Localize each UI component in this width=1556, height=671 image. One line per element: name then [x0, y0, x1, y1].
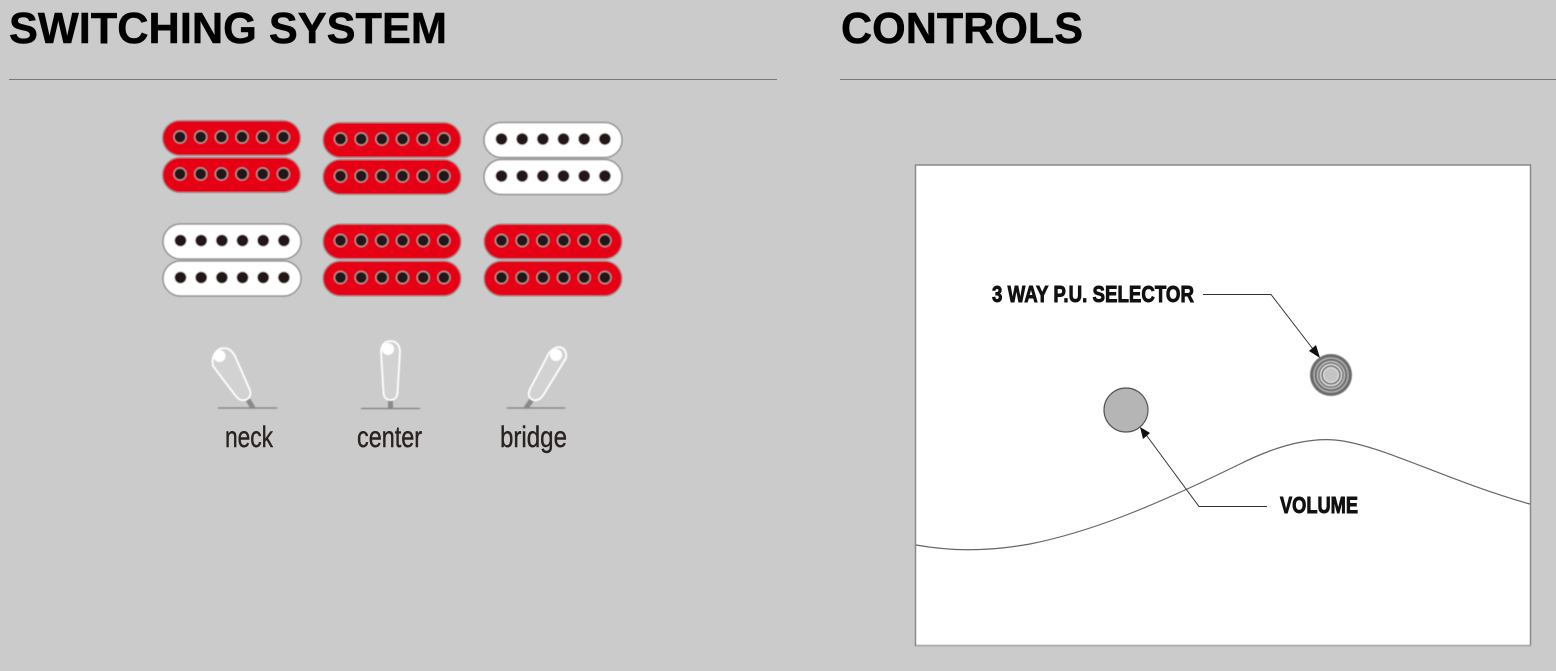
selector knob — [1310, 354, 1352, 396]
arrow: selector callout — [1203, 294, 1320, 358]
pickup: center position, top, active — [323, 122, 461, 194]
switch icon: center — [361, 341, 420, 408]
pickup: bridge position, top, inactive — [484, 122, 622, 194]
label: center: center — [357, 421, 422, 454]
arrow: volume callout — [1140, 427, 1267, 506]
pickup: neck position, top, active — [162, 120, 300, 192]
pickup: bridge position, bottom, active — [484, 224, 622, 296]
pickup row: bottom — [163, 224, 622, 296]
label: bridge: bridge — [500, 421, 567, 454]
pickup row: top — [162, 120, 622, 194]
panel: controls diagram — [916, 165, 1531, 646]
label: volume: VOLUME — [1280, 492, 1358, 518]
label: neck: neck — [225, 421, 274, 454]
guitar body curve — [916, 440, 1530, 550]
pickup: neck position, bottom, inactive — [163, 224, 301, 296]
volume knob — [1104, 388, 1148, 432]
label: 3 way p.u. selector: 3 WAY P.U. SELECTOR — [992, 281, 1194, 307]
pickup: center position, bottom, active — [323, 224, 461, 296]
heading: switching system: SWITCHING SYSTEM — [9, 4, 447, 53]
heading: controls: CONTROLS — [841, 4, 1083, 53]
switch icon: bridge — [507, 347, 566, 408]
switch icon: neck — [213, 348, 277, 408]
